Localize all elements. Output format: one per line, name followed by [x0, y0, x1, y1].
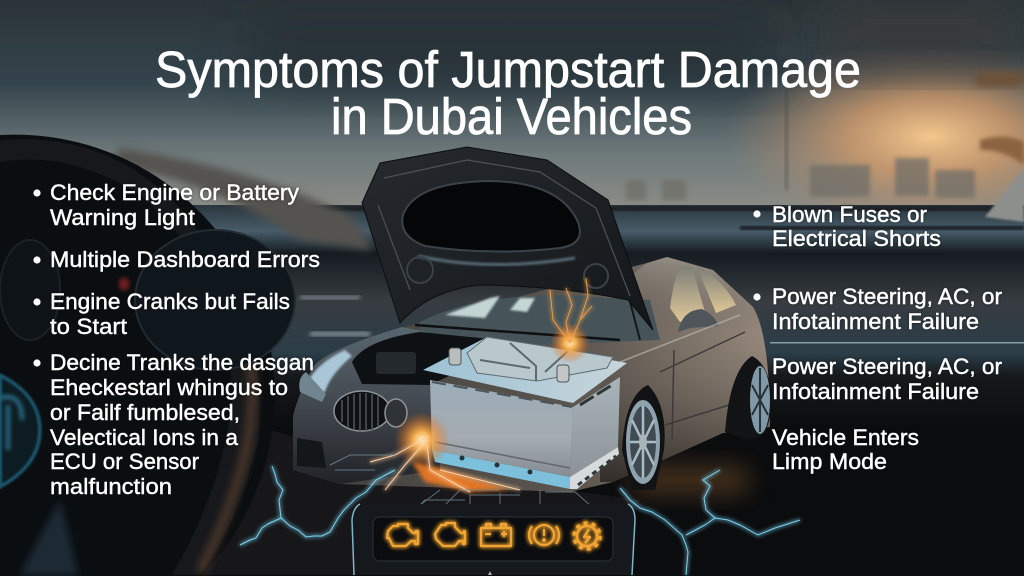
- car front end: [293, 327, 440, 484]
- grille: [334, 391, 390, 431]
- rear wheel: [725, 356, 772, 440]
- bullet: long symptom: ECU or Sensor: [50, 449, 199, 474]
- bullet: cranks: [33, 289, 290, 339]
- icon: gear bolt: [574, 523, 600, 549]
- car: [293, 257, 772, 492]
- wiper and strut: [415, 325, 620, 340]
- side windows: [670, 266, 705, 322]
- headlight: [299, 372, 326, 402]
- bullet: power steering: Power Steering, AC, or: [772, 284, 1003, 309]
- item: limp mode: Limp Mode: [772, 449, 887, 474]
- bullet: check engine: Warning Light: [50, 205, 196, 230]
- icon: battery: [481, 524, 511, 546]
- circuit traces: [330, 455, 600, 520]
- icon: brake warning: [529, 525, 559, 545]
- bullet: long symptom: Velectical Ions in a: [50, 425, 238, 450]
- engine bay: [352, 332, 520, 385]
- battery lid: [467, 337, 613, 381]
- right symptom list: [753, 202, 1003, 474]
- lightning bolts: [240, 466, 800, 575]
- battery: [423, 337, 627, 489]
- left symptom list: [33, 180, 320, 499]
- battery base strip: [432, 450, 570, 489]
- title: in Dubai Vehicles: [331, 88, 692, 145]
- bullet: power steering: [753, 284, 1003, 334]
- terminals: [449, 348, 461, 365]
- bullet: long symptom: Decine Tranks the dasgan: [50, 350, 314, 375]
- item: power steering repeat: Infotainment Failure: [772, 379, 979, 404]
- item: power steering repeat: Power Steering, AC, or: [772, 354, 1003, 379]
- front fender highlight: [303, 350, 352, 392]
- battery right face: [570, 377, 620, 477]
- battery front face: [430, 380, 573, 477]
- bullet: blown fuses: Electrical Shorts: [772, 226, 941, 251]
- battery top face: [423, 337, 627, 403]
- icons: [387, 523, 600, 549]
- body shading: [600, 257, 770, 482]
- bullet: long symptom: [33, 350, 314, 499]
- bullet: dashboard errors: Multiple Dashboard Errors: [50, 247, 320, 272]
- item: limp mode: [772, 425, 919, 474]
- bullet: power steering: Infotainment Failure: [772, 309, 979, 334]
- front wheel: [622, 385, 665, 490]
- steering wheel and instrument cluster: [0, 135, 295, 576]
- badge: [385, 399, 407, 427]
- bullet: long symptom: malfunction: [50, 474, 172, 499]
- hood cavity: [402, 181, 580, 252]
- windshield: [420, 295, 660, 345]
- mirror: [678, 309, 718, 332]
- lower bumper: [297, 438, 326, 468]
- bullet: check engine: Check Engine or Battery: [50, 180, 300, 205]
- warning light panel: [352, 504, 635, 575]
- title: [155, 41, 861, 145]
- bullet: check engine: [33, 180, 300, 230]
- bullet: cranks: to Start: [50, 314, 128, 339]
- door lines: [660, 332, 745, 440]
- item: power steering repeat: [772, 354, 1003, 404]
- sparks at top of battery: [550, 278, 592, 363]
- bullet: blown fuses: [753, 202, 941, 251]
- title: Symptoms of Jumpstart Damage: [155, 41, 861, 98]
- item: limp mode: Vehicle Enters: [772, 425, 919, 450]
- icon: check engine: [387, 524, 418, 546]
- icon: engine: [435, 523, 465, 546]
- car body: [293, 257, 770, 492]
- bullet: blown fuses: Blown Fuses or: [772, 202, 928, 227]
- bullet: cranks: Engine Cranks but Fails: [50, 289, 290, 314]
- open hood: [362, 147, 653, 330]
- bullet: long symptom: Eheckestarl whingus to: [50, 375, 288, 400]
- bullet: long symptom: or Failf fumblesed,: [50, 400, 240, 425]
- sparks at bottom of battery: [370, 412, 520, 492]
